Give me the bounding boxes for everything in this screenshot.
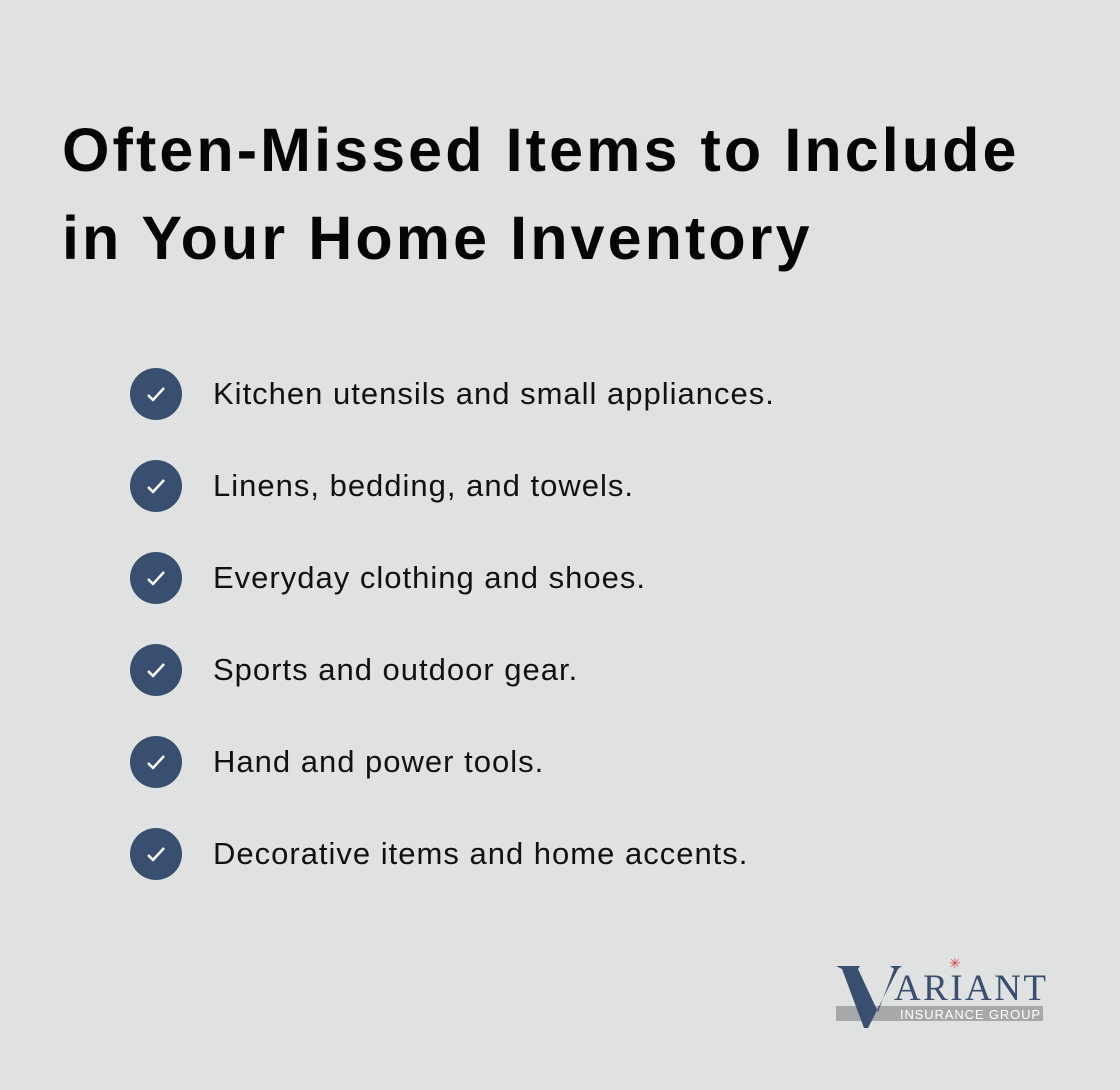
item 2 xyxy=(130,460,634,512)
item 6 xyxy=(130,828,748,880)
item 5: Hand and power tools. xyxy=(213,744,544,779)
logo: INSURANCE GROUP xyxy=(900,1007,1040,1022)
logo xyxy=(836,955,1046,1028)
item 3: Everyday clothing and shoes. xyxy=(213,560,646,595)
item 5 xyxy=(130,736,544,788)
item 1 xyxy=(130,368,775,420)
item 4: Sports and outdoor gear. xyxy=(213,652,578,687)
title xyxy=(62,116,1020,272)
item 1: Kitchen utensils and small appliances. xyxy=(213,376,775,411)
item 6: Decorative items and home accents. xyxy=(213,836,748,871)
logo: ARIANT xyxy=(894,968,1046,1009)
title: Often-Missed Items to Include xyxy=(62,116,1020,184)
logo: ✳ xyxy=(949,955,961,971)
item 3 xyxy=(130,552,646,604)
item 4 xyxy=(130,644,578,696)
title: in Your Home Inventory xyxy=(62,204,813,272)
item 2: Linens, bedding, and towels. xyxy=(213,468,634,503)
